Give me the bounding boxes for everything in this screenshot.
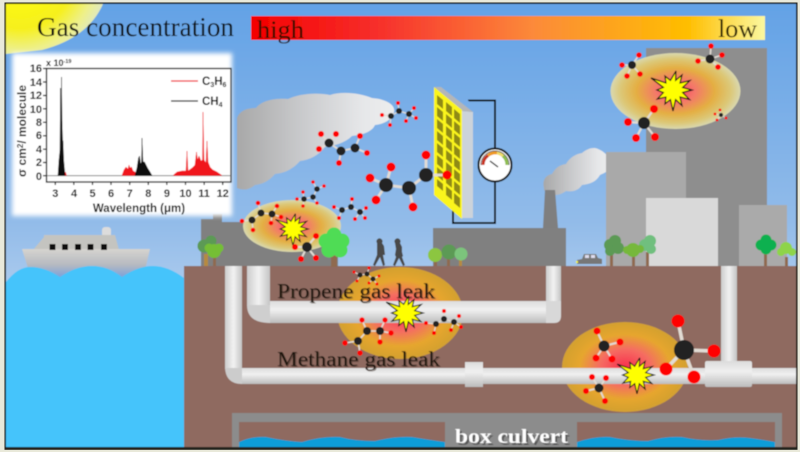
- plot frame: [46, 68, 231, 182]
- x-axis numbers: 12: [217, 188, 229, 200]
- right factory block: [433, 228, 566, 266]
- gauge: [478, 148, 512, 182]
- molecule: tiny methane: [714, 109, 727, 121]
- x-axis title: Wavelength (μm): [93, 203, 185, 215]
- concentration gradient bar: [251, 16, 765, 44]
- legend: 4: [219, 102, 223, 109]
- x-axis numbers: 3: [52, 188, 58, 200]
- x-axis numbers: 5: [89, 188, 96, 200]
- pipe flange: [465, 362, 483, 387]
- explosion: left: [275, 214, 308, 246]
- molecule: methane on lower pipe: [583, 374, 609, 404]
- y-axis numbers: 12: [30, 90, 42, 102]
- sensor top face: [434, 87, 473, 112]
- label: methane gas leak: Methane gas leak: [277, 347, 441, 371]
- black CH4 spectrum: [58, 77, 152, 176]
- gas cloud: propene pipe: [337, 267, 463, 359]
- legend: C: [202, 76, 210, 88]
- culvert label: box culvert: [457, 428, 570, 450]
- tree group: city right: [756, 234, 796, 267]
- x-axis numbers: 10: [179, 188, 192, 200]
- molecule: propene below pipe: [342, 317, 394, 356]
- culvert chamber right: [577, 422, 775, 448]
- sea: [6, 266, 184, 448]
- y-axis title: / molecule: [15, 85, 29, 144]
- tree group: right of people: [428, 244, 468, 266]
- y-axis title: 2: [16, 143, 25, 148]
- bar label: high: high: [257, 17, 305, 44]
- sensor wire: [453, 100, 495, 223]
- tree group: city centre: [604, 235, 656, 267]
- y-axis numbers: 14: [30, 77, 43, 89]
- molecule: small propene above left cloud: [295, 180, 326, 208]
- upper propene pipe: [247, 266, 561, 323]
- lower methane pipe: [225, 266, 797, 387]
- explosion: upper right: [651, 71, 692, 111]
- molecule: propene on cloud: [316, 131, 370, 166]
- title: gas concentration: Gas concentration: [37, 12, 235, 42]
- y-axis title: σ cm: [15, 148, 29, 177]
- sensor: [434, 87, 512, 223]
- x-axis numbers: [52, 188, 229, 200]
- absorption spectrum panel: [12, 53, 232, 216]
- molecule: methane lower: [624, 105, 659, 142]
- tree in front of left cloud: [318, 228, 350, 267]
- culvert label: box culvert: [455, 426, 568, 448]
- label: propene gas leak: Propene gas leak: [277, 279, 436, 303]
- factory chimney: [543, 190, 558, 228]
- culvert chamber left: [239, 422, 445, 448]
- molecule: small propene right of cloud: [332, 197, 368, 221]
- x-axis numbers: 6: [108, 188, 114, 200]
- y-axis numbers: 2: [36, 157, 42, 169]
- legend: 3: [210, 82, 214, 89]
- molecule: methane upper right: [695, 43, 725, 70]
- ground: [184, 266, 797, 448]
- legend: 6: [223, 82, 227, 89]
- x-axis numbers: 11: [198, 188, 210, 200]
- molecule: tiny propene above pipe: [352, 266, 380, 286]
- car: [576, 254, 602, 264]
- legend: CH: [202, 96, 219, 108]
- scale factor: -19: [64, 59, 71, 65]
- x-axis numbers: 9: [164, 188, 170, 200]
- label: propene gas leak: Propene gas leak: [278, 280, 437, 304]
- box culvert: [232, 413, 782, 450]
- yellow sensing grid: [434, 87, 462, 219]
- zero line: [47, 175, 231, 177]
- molecule: large propene at sensor: [366, 150, 452, 212]
- x-axis numbers: 7: [127, 188, 133, 200]
- culvert water right: [577, 437, 775, 448]
- gas cloud: upper right: [610, 53, 740, 129]
- tall dark building: [646, 48, 767, 266]
- legend: [171, 76, 227, 109]
- molecule: methane in lower cloud: [592, 328, 624, 362]
- bar label: low: low: [718, 16, 757, 43]
- y-axis numbers: 4: [36, 144, 43, 156]
- molecule: methane in left cloud: [292, 233, 319, 262]
- x-axis numbers: 8: [145, 188, 151, 200]
- y-axis numbers: 10: [30, 104, 42, 116]
- explosion: methane pipe: [617, 358, 654, 394]
- molecule: propene in left cloud: [240, 201, 283, 232]
- molecule: methane upper left: [619, 52, 643, 79]
- tree group: street left: [198, 236, 224, 267]
- ship: [22, 227, 150, 280]
- left factory: [201, 214, 338, 266]
- x-axis numbers: 4: [71, 188, 78, 200]
- y-axis ticks: [43, 68, 46, 176]
- culvert water left: [239, 437, 445, 448]
- right low building: [739, 205, 787, 266]
- pedestrians: [373, 238, 405, 266]
- scale factor: x 10: [46, 58, 64, 68]
- y-axis numbers: 8: [36, 117, 42, 129]
- molecule: large methane: [660, 314, 720, 384]
- label: methane gas leak: Methane gas leak: [278, 348, 442, 372]
- light building: [646, 198, 718, 266]
- molecule: propene right of pipe leak: [424, 309, 463, 335]
- legend: H: [214, 76, 223, 88]
- y-axis numbers: 0: [36, 171, 42, 183]
- sun glow: [6, 4, 103, 54]
- gas cloud: left: [243, 200, 341, 252]
- panel background: [12, 53, 232, 216]
- y-axis numbers: 6: [36, 130, 42, 142]
- pipe junction: [705, 361, 752, 387]
- gas cloud: methane pipe: [562, 322, 688, 412]
- large smoke cloud: [237, 93, 394, 190]
- y-axis numbers: [30, 63, 43, 183]
- red C3H6 spectrum: [64, 112, 222, 176]
- small chimney smoke: [543, 148, 611, 195]
- x-axis ticks: [55, 182, 223, 185]
- y-axis numbers: 16: [30, 63, 42, 75]
- explosion: propene pipe: [386, 296, 423, 332]
- molecule: propene near cloud: [380, 101, 418, 127]
- sensor side face: [462, 111, 473, 218]
- mid grey building: [606, 152, 686, 266]
